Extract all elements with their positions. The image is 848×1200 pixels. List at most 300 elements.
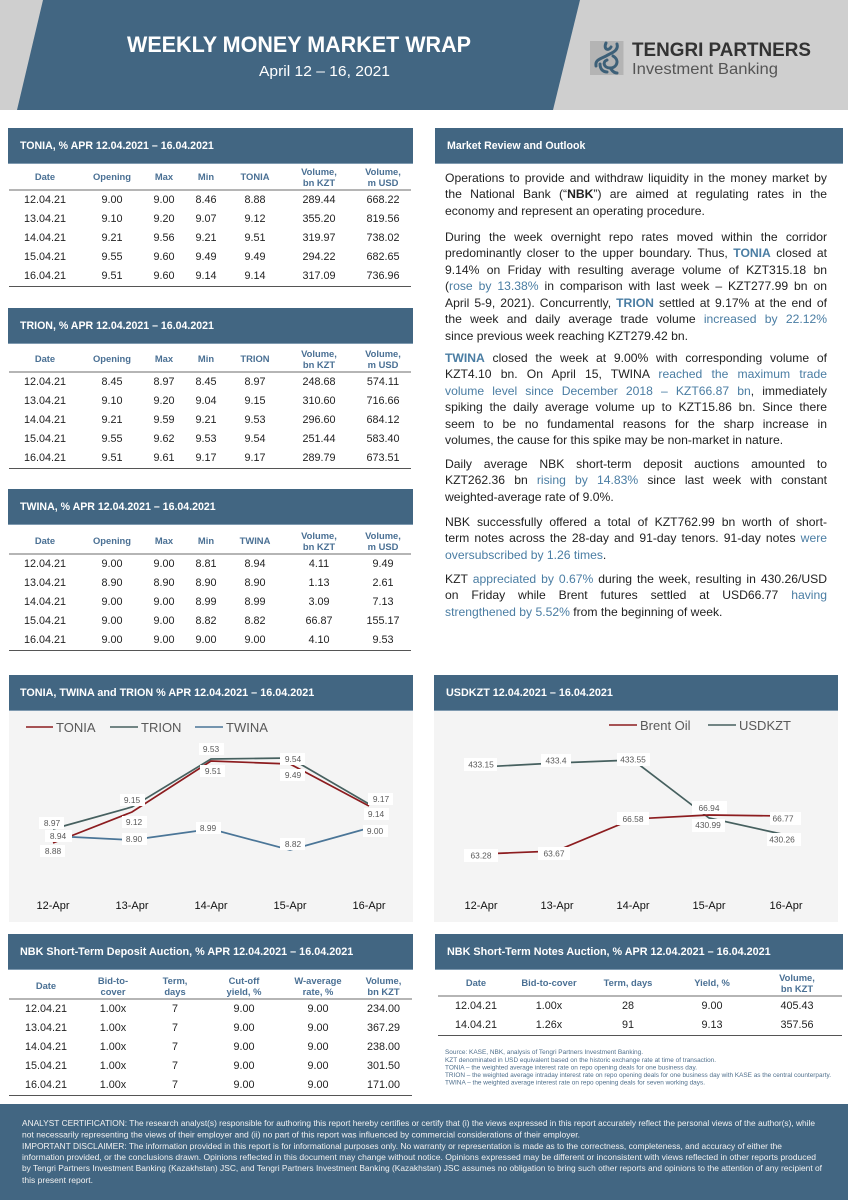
table: TWINA data: 3.09 [308, 596, 330, 608]
logo: TENGRI PARTNERS [632, 39, 811, 61]
x axis labels: 12-Apr [36, 900, 70, 912]
series lines [53, 758, 369, 850]
data labels: 9.15 [124, 795, 140, 805]
table: deposit auction data: 9.00 [233, 1060, 254, 1072]
table: deposit auction data: 7 [172, 1041, 178, 1053]
table: TRION data: 574.11 [367, 376, 399, 388]
table: deposit auction data: 1.00x [100, 1060, 126, 1072]
table: TWINA data: 8.90 [153, 577, 174, 589]
table: TONIA data: Max [155, 171, 173, 182]
table: deposit auction data: Volume, [366, 974, 401, 986]
table: TONIA data: 9.00 [101, 194, 122, 206]
data labels: 433.4 [546, 756, 567, 766]
data labels [39, 743, 393, 857]
logo [590, 39, 811, 78]
table: TWINA data: 12.04.21 [24, 558, 66, 570]
table: TRION data: bn KZT [303, 359, 335, 370]
text block: market review paragraph 4: weighted-average rate of 9.0%. [445, 490, 614, 504]
table: TONIA data: 819.56 [366, 213, 400, 225]
footer disclaimer: by Tengri Partners Investment Banking (Kazakhstan) JSC, and Tengri Partners Investment Banking (Kazakhstan) JSC assumes no obligation to bring such other reports and opinions to the attention of any recipient of [22, 1163, 823, 1173]
table: TWINA data: 7.13 [372, 596, 394, 608]
table: TONIA data: 9.00 [153, 194, 174, 206]
text block: market review paragraph 4: KZT262.36 bn rising by 14.83% since last week with constant [445, 473, 827, 487]
heading: notes auction: NBK Short-Term Notes Auction, % APR 12.04.2021 – 16.04.2021 [447, 946, 771, 958]
table: TONIA data: Opening [93, 171, 131, 182]
heading: TONIA [8, 128, 413, 164]
table: TRION data: 9.10 [101, 395, 122, 407]
table: TWINA data: 155.17 [366, 615, 400, 627]
text block: source notes: TRION – the weighted average intraday interest rate on repo opening deals for one business day with KASE as the central counterparty. [445, 1072, 831, 1079]
data labels: 433.55 [620, 754, 646, 764]
text block: source notes: TWINA – the weighted average interest rate on repo opening deals for seven working days. [445, 1080, 705, 1086]
title: WEEKLY MONEY MARKET WRAP [127, 32, 471, 57]
table: TRION data: 9.59 [153, 414, 174, 426]
table: TONIA data: 9.20 [153, 213, 174, 225]
table: TONIA data: 289.44 [302, 194, 336, 206]
table: TONIA data: 13.04.21 [24, 213, 66, 225]
table: TWINA data: Volume, [301, 530, 337, 540]
text block: market review paragraph 3: volume level since December 2018 – KZT66.87 bn, immediately [445, 384, 827, 398]
table: TONIA data: 9.60 [153, 251, 174, 263]
text block: market review paragraph 2: since previous week reaching KZT279.42 bn. [445, 329, 688, 343]
table: TWINA data: 9.00 [195, 634, 216, 646]
table: notes auction data: Volume, [779, 972, 815, 982]
panel: notes auction table [435, 934, 843, 1036]
table: TRION data: 673.51 [366, 452, 400, 464]
data labels: 8.94 [50, 831, 66, 841]
table: TWINA data: 9.53 [372, 634, 394, 646]
data labels: 8.90 [126, 834, 142, 844]
table: notes auction data: 9.13 [701, 1019, 722, 1031]
text block: market review paragraph 6 [445, 572, 827, 619]
table: TONIA data: 9.14 [244, 270, 266, 282]
table: deposit auction data: 9.00 [307, 1003, 328, 1015]
data labels: 9.12 [126, 817, 142, 827]
table: notes auction data: 9.00 [701, 1000, 722, 1012]
table: TRION data: 9.53 [244, 414, 266, 426]
table: TONIA data: 9.12 [244, 213, 266, 225]
heading: TRION [8, 308, 413, 344]
table: notes auction data: 357.56 [780, 1019, 814, 1031]
table: deposit auction data: bn KZT [367, 986, 400, 997]
table: deposit auction data: 9.00 [307, 1060, 328, 1072]
x axis labels: 16-Apr [352, 900, 386, 912]
table: TRION data: 9.15 [244, 395, 266, 407]
text block: market review paragraph 3: spiking the daily average volume up to KZT15.86 bn. Since there [445, 400, 827, 414]
text block: source notes [445, 1049, 831, 1086]
table: TONIA data: 736.96 [366, 270, 400, 282]
table: notes auction data: Yield, % [694, 977, 730, 988]
table: TONIA data: 294.22 [302, 251, 336, 263]
text block: market review paragraph 6: strengthened by 5.52% from the beginning of week. [445, 605, 722, 619]
text block: market review paragraph 5 [445, 515, 827, 562]
table: deposit auction data: days [164, 986, 186, 997]
table: TONIA data: 9.10 [101, 213, 122, 225]
table: deposit auction data: 12.04.21 [25, 1003, 67, 1015]
x axis labels: 14-Apr [616, 900, 650, 912]
table: TRION data: Min [198, 353, 214, 364]
footer disclaimer: ANALYST CERTIFICATION: The research analyst(s) responsible for authoring this report hereby certifies or certify that (i) the views expressed in this report accurately reflect the personal views of the author(s), while [22, 1118, 815, 1128]
table: TRION data: 14.04.21 [24, 414, 66, 426]
table: TWINA data: 8.90 [195, 577, 216, 589]
text block: market review paragraph 1: economy and represent an operating procedure. [445, 204, 705, 218]
line chart: Brent and USDKZT [464, 718, 803, 912]
data labels: 66.94 [699, 803, 720, 813]
text block: market review paragraph 3: KZT4.10 bn. On April 15, TWINA reached the maximum trade [445, 367, 827, 381]
text block: source notes: KZT denominated in USD equivalent based on the historic exchange rate at time of transaction. [445, 1057, 716, 1064]
table: TRION data: 310.60 [302, 395, 336, 407]
series lines [481, 760, 786, 854]
text block: market review paragraph 5: NBK successfully offered a total of KZT762.99 bn worth of short- [445, 515, 827, 529]
x axis labels: 13-Apr [540, 900, 574, 912]
table: deposit auction data: 1.00x [100, 1003, 126, 1015]
heading: market review [435, 128, 843, 164]
table: deposit auction data: 7 [172, 1079, 178, 1091]
data labels: 9.17 [373, 794, 389, 804]
table: deposit auction data: cover [100, 986, 126, 997]
table: TRION data: 9.54 [244, 433, 266, 445]
table: TONIA data: 16.04.21 [24, 270, 66, 282]
table: TONIA data: bn KZT [303, 177, 335, 188]
table: TRION data: 13.04.21 [24, 395, 66, 407]
legend [609, 718, 791, 733]
table: TRION data: 9.21 [195, 414, 216, 426]
table: TRION data: 8.97 [153, 376, 174, 388]
table: TRION data: 8.97 [244, 376, 266, 388]
heading: deposit auction [8, 934, 413, 970]
text block: market review paragraph 6: on Friday while Brent futures settled at USD66.77 having [445, 588, 827, 602]
table: TRION data: 248.68 [302, 376, 336, 388]
table: TRION data: 251.44 [302, 433, 336, 445]
table: deposit auction data: 234.00 [367, 1003, 400, 1015]
table: TONIA data: 319.97 [302, 232, 336, 244]
table: TONIA data: m USD [368, 177, 398, 188]
footer disclaimer: this present report. [22, 1175, 93, 1185]
table: TONIA data: 9.07 [195, 213, 216, 225]
table: TWINA data: 2.61 [372, 577, 394, 589]
table: TWINA data: 8.94 [244, 558, 266, 570]
table: TRION data: 296.60 [302, 414, 336, 426]
table: TWINA data: 8.81 [195, 558, 216, 570]
table: TWINA data: 9.00 [101, 596, 122, 608]
table: TWINA data: 8.82 [195, 615, 216, 627]
table: notes auction data: Bid-to-cover [521, 977, 577, 988]
table: TONIA data: 8.46 [195, 194, 216, 206]
table: TWINA data: TWINA [240, 535, 270, 546]
table: TONIA data: 9.56 [153, 232, 174, 244]
table: TWINA data: 9.00 [244, 634, 266, 646]
table: notes auction data: 91 [622, 1019, 634, 1031]
text block: market review paragraph 4: Daily average NBK short-term deposit auctions amounted to [445, 457, 827, 471]
table: TRION data: 684.12 [366, 414, 400, 426]
table: deposit auction data: 301.50 [367, 1060, 400, 1072]
heading: TWINA: TWINA, % APR 12.04.2021 – 16.04.2021 [20, 501, 216, 513]
table: TWINA data: Max [155, 535, 173, 546]
table: TRION data: 8.45 [195, 376, 216, 388]
table: TRION data: 9.17 [244, 452, 266, 464]
table: TRION data: Opening [93, 353, 131, 364]
table: TRION data: 716.66 [366, 395, 400, 407]
heading: rates chart: TONIA, TWINA and TRION % APR 12.04.2021 – 16.04.2021 [20, 687, 314, 699]
table: TONIA data: 682.65 [366, 251, 400, 263]
data labels: 66.58 [623, 814, 644, 824]
table: notes auction data: 1.26x [536, 1019, 562, 1031]
data labels: 433.15 [468, 760, 494, 770]
table: deposit auction data: 7 [172, 1003, 178, 1015]
heading: deposit auction: NBK Short-Term Deposit Auction, % APR 12.04.2021 – 16.04.2021 [20, 946, 353, 958]
table: deposit auction data: 9.00 [307, 1079, 328, 1091]
x axis labels: 15-Apr [692, 900, 726, 912]
table: TRION data: 583.40 [366, 433, 400, 445]
table: TRION data: 9.17 [195, 452, 216, 464]
data labels: 9.00 [367, 826, 383, 836]
table: notes auction data: 14.04.21 [455, 1019, 497, 1031]
data labels: 8.82 [285, 839, 301, 849]
footer disclaimer: information provided, or the conclusions drawn. Opinions reflected in this document may change without notice. Opinions expressed may be different or inconsistent with views reflected in other reports produced [22, 1152, 816, 1162]
x axis labels: 12-Apr [464, 900, 498, 912]
text block: source notes: Source: KASE, NBK, analysis of Tengri Partners Investment Banking. [445, 1049, 643, 1056]
table: TONIA data: 8.88 [244, 194, 266, 206]
table: deposit auction data: 1.00x [100, 1041, 126, 1053]
table: deposit auction data: 367.29 [367, 1022, 400, 1034]
table: TRION data: 9.61 [153, 452, 174, 464]
text block: source notes: TONIA – the weighted average interest rate on repo opening deals for one business day. [445, 1064, 697, 1072]
table: TWINA data: 8.90 [244, 577, 266, 589]
table: TONIA data: 9.51 [244, 232, 266, 244]
table: notes auction data: 12.04.21 [455, 1000, 497, 1012]
data labels: 63.67 [544, 848, 565, 858]
table: TWINA data: 16.04.21 [24, 634, 66, 646]
table: deposit auction data: 16.04.21 [25, 1079, 67, 1091]
panel: deposit auction table [8, 934, 413, 1096]
data labels: 8.88 [45, 846, 61, 856]
data labels: 9.49 [285, 770, 301, 780]
table: TWINA data: Volume, [365, 530, 401, 540]
footer disclaimer: not necessarily representing the views of their employer and (ii) no part of this report was influenced by commercial considerations of their employer. [22, 1130, 580, 1140]
heading: TWINA [8, 489, 413, 525]
table: TONIA data: Date [35, 171, 55, 182]
table: TONIA data: TONIA [240, 171, 270, 182]
table: notes auction data: bn KZT [781, 983, 813, 994]
heading: market review: Market Review and Outlook [447, 140, 585, 152]
heading: TONIA: TONIA, % APR 12.04.2021 – 16.04.2021 [20, 140, 214, 152]
table: deposit auction data: 1.00x [100, 1022, 126, 1034]
table: TRION data: 9.53 [195, 433, 216, 445]
table: TRION data: 9.62 [153, 433, 174, 445]
text block: market review paragraph 3: volumes, the cause for this spike may be non-market in nature. [445, 433, 783, 447]
data labels: 63.28 [471, 850, 492, 860]
table: deposit auction data: 9.00 [307, 1041, 328, 1053]
data labels: 9.14 [368, 809, 384, 819]
table: TRION data: 9.21 [101, 414, 122, 426]
table: deposit auction data: 1.00x [100, 1079, 126, 1091]
table: TRION data: 9.55 [101, 433, 122, 445]
table: deposit auction data: 9.00 [233, 1041, 254, 1053]
table: TRION data: 8.45 [101, 376, 122, 388]
table: TONIA data [9, 166, 411, 287]
data labels: 430.99 [695, 820, 721, 830]
table: TWINA data [9, 530, 411, 651]
table: TRION data: 9.51 [101, 452, 122, 464]
table: deposit auction data: 7 [172, 1022, 178, 1034]
text block: market review paragraph 2: 9.14% on Friday with resulting average volume of KZT315.18 bn [445, 263, 827, 277]
table: TWINA data: 9.49 [372, 558, 394, 570]
table: TWINA data: bn KZT [303, 541, 335, 552]
table: TWINA data: 13.04.21 [24, 577, 66, 589]
panel: USDKZT line chart [434, 675, 838, 922]
table: deposit auction data: 15.04.21 [25, 1060, 67, 1072]
panel: TWINA table [8, 489, 413, 651]
table: TWINA data: 15.04.21 [24, 615, 66, 627]
table: TWINA data: 8.99 [195, 596, 216, 608]
text block: market review paragraph 1: Operations to provide and withdraw liquidity in the money market by [445, 171, 827, 185]
table: TWINA data: 1.13 [308, 577, 330, 589]
table: TONIA data: 9.49 [244, 251, 266, 263]
table: TONIA data: 355.20 [302, 213, 336, 225]
table: TONIA data: 9.49 [195, 251, 216, 263]
table: TRION data: Max [155, 353, 173, 364]
table: TWINA data: 4.10 [308, 634, 330, 646]
table: TONIA data: 9.51 [101, 270, 122, 282]
table: TWINA data: 8.82 [244, 615, 266, 627]
text block: market review paragraph 2: the week and daily average trade volume increased by 22.12% [445, 312, 827, 326]
table: TONIA data: Volume, [365, 166, 401, 176]
table: TONIA data: 9.21 [101, 232, 122, 244]
text block: market review paragraph 6: KZT appreciated by 0.67% during the week, resulting in 430.26/USD [445, 572, 827, 586]
table: TWINA data: 9.00 [101, 615, 122, 627]
table: deposit auction data: yield, % [227, 986, 261, 997]
table: TRION data: 16.04.21 [24, 452, 66, 464]
x axis labels [464, 900, 803, 912]
text block: market review paragraph 5: oversubscribed by 1.26 times. [445, 548, 606, 562]
table: TRION data: Volume, [301, 348, 337, 358]
x axis labels: 16-Apr [769, 900, 803, 912]
table: TWINA data: 9.00 [153, 558, 174, 570]
table: TONIA data: 9.60 [153, 270, 174, 282]
table: deposit auction data: 238.00 [367, 1041, 400, 1053]
data labels: 430.26 [769, 834, 795, 844]
legend: TONIA [56, 720, 96, 735]
data labels: 66.77 [773, 814, 794, 824]
data labels: 9.54 [285, 754, 301, 764]
table: TWINA data: m USD [368, 541, 398, 552]
table: deposit auction data: 9.00 [233, 1079, 254, 1091]
x axis labels: 15-Apr [273, 900, 307, 912]
table: TWINA data: 9.00 [101, 634, 122, 646]
heading: USDKZT chart: USDKZT 12.04.2021 – 16.04.2021 [446, 687, 613, 699]
data labels [464, 753, 801, 862]
data labels: 8.97 [44, 818, 60, 828]
text block: market review paragraph 3 [445, 351, 827, 447]
table: TRION data [9, 348, 411, 469]
table: TONIA data: 668.22 [366, 194, 400, 206]
text block: market review paragraph 2: (rose by 13.38% in comparison with last week – KZT277.99 bn on [445, 279, 827, 293]
table: deposit auction data: W-average [294, 974, 342, 986]
table: TRION data: Volume, [365, 348, 401, 358]
table: TONIA data: 9.21 [195, 232, 216, 244]
table: TWINA data: 14.04.21 [24, 596, 66, 608]
footer disclaimer: IMPORTANT DISCLAIMER: The information provided in this report is for informational purposes only. No warranty or representation is made as to the correctness, completeness, and accuracy of either the [22, 1141, 782, 1151]
table: TRION data: 15.04.21 [24, 433, 66, 445]
legend: USDKZT [739, 718, 791, 733]
table: TRION data: 12.04.21 [24, 376, 66, 388]
table: TWINA data: 9.00 [101, 558, 122, 570]
table: TRION data: 289.79 [302, 452, 336, 464]
table: TONIA data: 12.04.21 [24, 194, 66, 206]
table: TONIA data: 738.02 [366, 232, 400, 244]
heading: rates chart [9, 675, 413, 711]
table: deposit auction data: 9.00 [233, 1003, 254, 1015]
table: notes auction data: 405.43 [780, 1000, 814, 1012]
logo: Investment Banking [632, 61, 778, 78]
heading: notes auction [435, 934, 843, 970]
table: TONIA data: 15.04.21 [24, 251, 66, 263]
panel: TONIA table [8, 128, 413, 287]
footer disclaimer [0, 1104, 848, 1200]
table: TRION data: m USD [368, 359, 398, 370]
table: deposit auction data: 9.00 [307, 1022, 328, 1034]
table: deposit auction data [9, 974, 412, 1096]
table: deposit auction data: 14.04.21 [25, 1041, 67, 1053]
table: TONIA data: 9.55 [101, 251, 122, 263]
table: TWINA data: 8.99 [244, 596, 266, 608]
text block: market review paragraph 5: term notes across the 28-day and 91-day tenors. 91-day notes were [445, 531, 827, 545]
table: deposit auction data: Bid-to- [98, 974, 128, 986]
data labels: 8.99 [200, 823, 216, 833]
table: notes auction data: 1.00x [536, 1000, 562, 1012]
legend [26, 720, 268, 735]
table: TWINA data: 66.87 [305, 615, 333, 627]
table: TWINA data: Opening [93, 535, 131, 546]
data labels: 9.51 [205, 766, 221, 776]
table: TONIA data: 317.09 [302, 270, 336, 282]
table: deposit auction data: Cut-off [229, 974, 259, 986]
x axis labels: 14-Apr [194, 900, 228, 912]
text block: market review paragraph 2: predominantly closer to the upper boundary. Thus, TONIA closed at [445, 246, 827, 260]
table: TWINA data: Date [35, 535, 55, 546]
table: TWINA data: 9.00 [153, 615, 174, 627]
text block: market review paragraph 2: During the week overnight repo rates moved within the corridor [445, 230, 827, 244]
x axis labels [36, 900, 386, 912]
panel: rates line chart [9, 675, 413, 922]
table: notes auction data: 28 [622, 1000, 634, 1012]
table: TONIA data: 14.04.21 [24, 232, 66, 244]
data labels: 9.53 [203, 744, 219, 754]
table: TWINA data: 4.11 [309, 558, 329, 570]
heading: USDKZT chart [434, 675, 838, 711]
table: deposit auction data: 171.00 [367, 1079, 400, 1091]
table: TWINA data: Min [198, 535, 214, 546]
text block: market review paragraph 2 [445, 230, 827, 343]
table: TRION data: 9.20 [153, 395, 174, 407]
table: TRION data: Date [35, 353, 55, 364]
table: notes auction data [438, 972, 842, 1036]
table: deposit auction data: 9.00 [233, 1022, 254, 1034]
table: TWINA data: 8.90 [101, 577, 122, 589]
date range: April 12 – 16, 2021 [259, 63, 390, 80]
text block: market review paragraph 3: TWINA closed the week at 9.00% with corresponding volume of [445, 351, 827, 365]
text block: market review paragraph 3: seem to be no fundamental reasons for the sharp increase in [445, 417, 827, 431]
x axis labels: 13-Apr [115, 900, 149, 912]
text block: market review paragraph 1 [445, 171, 827, 218]
line chart: TONIA TRION TWINA [26, 720, 393, 912]
heading: TRION: TRION, % APR 12.04.2021 – 16.04.2021 [20, 320, 214, 332]
text block: market review paragraph 2: April 5-9, 2021). Concurrently, TRION settled at 9.17% at the end of [445, 296, 827, 310]
table: TRION data: TRION [240, 353, 270, 364]
table: TWINA data: 9.00 [153, 596, 174, 608]
table: TONIA data: Volume, [301, 166, 337, 176]
table: deposit auction data: Date [36, 980, 56, 991]
